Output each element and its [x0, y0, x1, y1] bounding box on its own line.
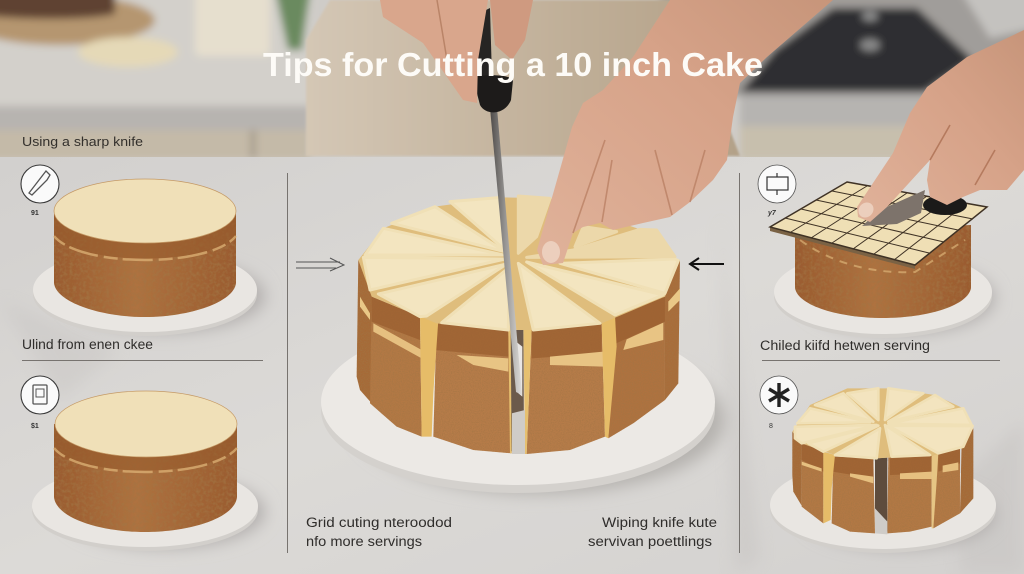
knife on grid: [862, 190, 967, 226]
label: wiping knife caption: servivan poettlings: [588, 534, 712, 549]
icon: snowflake badge: [760, 376, 798, 414]
panel: center sliced cake on plate: [321, 196, 725, 494]
kitchen background: [0, 0, 1024, 160]
panel: top-left whole cake: [33, 179, 265, 336]
badge numbers: y7: [767, 210, 777, 217]
panel: top-right cake with grid: [770, 182, 995, 338]
icon: right hand on grid: [855, 30, 1024, 222]
divider lines: [22, 173, 1000, 553]
panel: bottom-right sliced cake: [770, 388, 996, 553]
dark slit under knife: [511, 327, 524, 452]
label: using a sharp knife: Using a sharp knife: [22, 135, 143, 149]
grid cutting guide: [770, 182, 987, 269]
top surface wedges: [358, 196, 680, 330]
badge numbers: 8: [769, 423, 773, 430]
icon: upper hand gripping knife: [380, 0, 533, 103]
title: Tips for Cutting a 10 inch Cake: [263, 46, 763, 83]
sliced cake body: [792, 388, 973, 534]
cut cake slices: [357, 196, 680, 454]
marble shading: [0, 210, 1024, 574]
label: wiping knife caption: Wiping knife kute: [602, 515, 717, 530]
icon: sharp knife badge: [21, 165, 59, 203]
panel: bottom-left whole cake: [32, 391, 265, 551]
badge numbers: 91: [31, 210, 39, 217]
badge numbers: $1: [31, 423, 39, 430]
icon: knife cutting through cake: [473, 8, 522, 395]
icon: center hand pressing slice: [537, 0, 833, 265]
arrow: left outline arrow: [296, 258, 344, 271]
label: grid cutting caption: nfo more servings: [306, 534, 422, 549]
marble counter: [0, 157, 1024, 574]
label: grid cutting caption: Grid cuting nteroodod: [306, 515, 452, 530]
label: left middle caption: Ulind from enen ckee: [22, 337, 153, 352]
label: right middle caption: Chiled kiifd hetwen serving: [760, 338, 930, 353]
apron: [306, 0, 740, 156]
icon: frame badge: [758, 165, 796, 203]
badge numbers: [31, 210, 777, 430]
icon: container badge: [21, 376, 59, 414]
arrow: right black arrow: [690, 258, 724, 270]
